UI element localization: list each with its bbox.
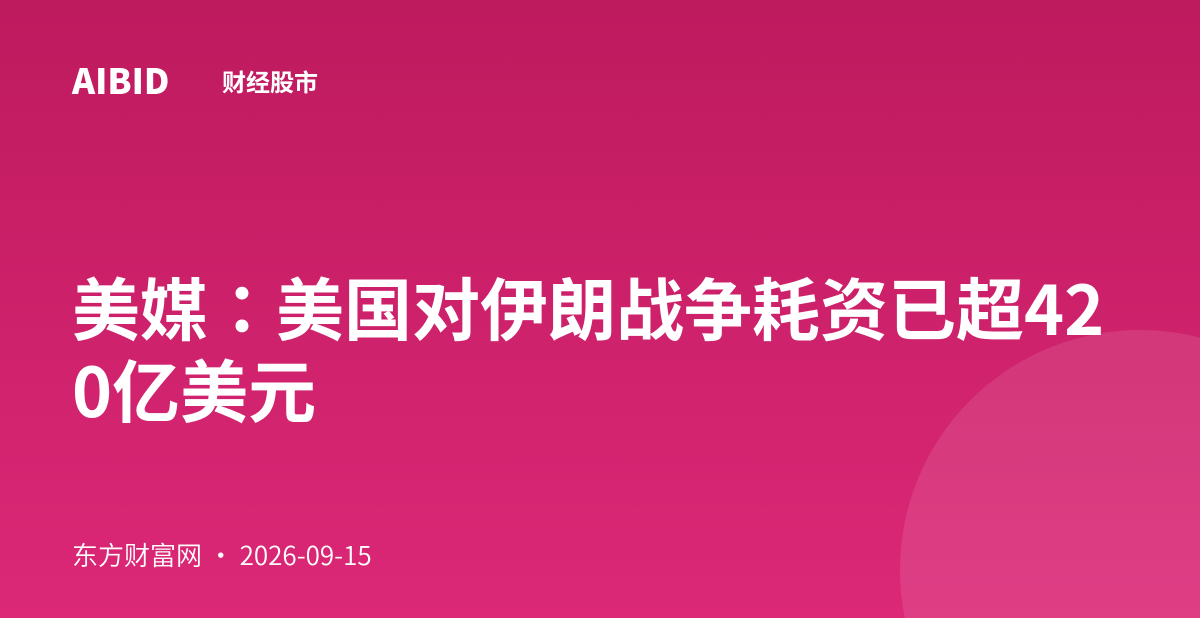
source and date: 东方财富网 · 2026-09-15 [72,536,372,573]
title: 美媒：美国对伊朗战争耗资已超420亿美元 [72,256,1104,437]
decorative circle [900,330,1200,630]
category label: 财经股市 [222,63,318,98]
brand logo text: AIBID [72,54,169,105]
